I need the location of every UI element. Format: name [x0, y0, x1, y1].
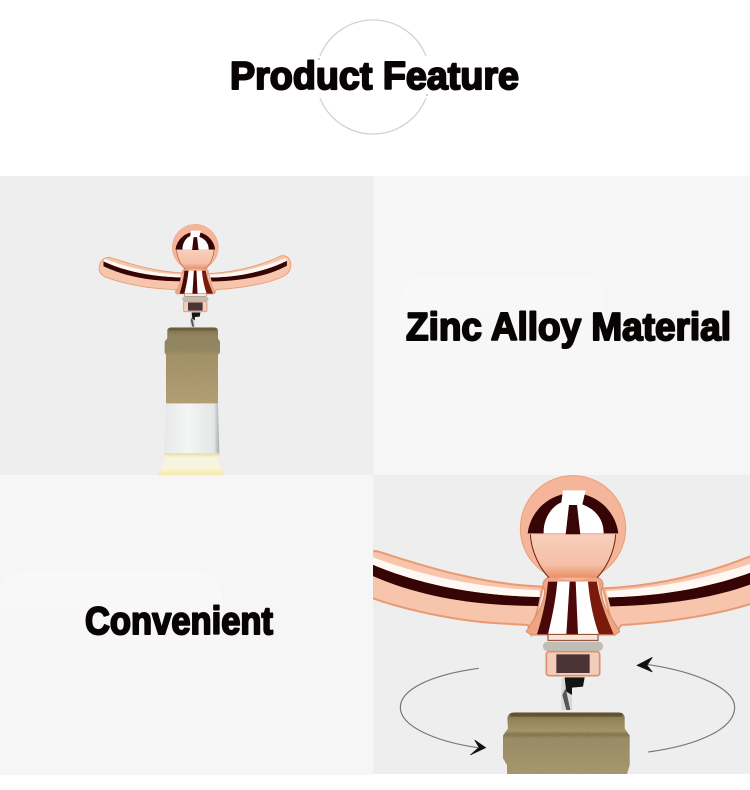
heading: Zinc Alloy Material: Zinc Alloy Material	[406, 306, 731, 349]
arrow: rotation left	[400, 668, 486, 755]
heading: Convenient: Convenient	[85, 600, 273, 643]
panel: top right background	[373, 176, 750, 475]
title: Product Feature	[230, 55, 519, 98]
panel: bottom right background	[373, 475, 750, 774]
image: corkscrew on bottle, small	[99, 224, 291, 475]
arrow: rotation right	[637, 657, 735, 752]
decorative circle behind title	[318, 20, 428, 134]
panel: bottom left background	[0, 475, 373, 775]
image: corkscrew close-up with rotation arrows	[353, 476, 750, 774]
panel: top left background	[0, 176, 373, 475]
